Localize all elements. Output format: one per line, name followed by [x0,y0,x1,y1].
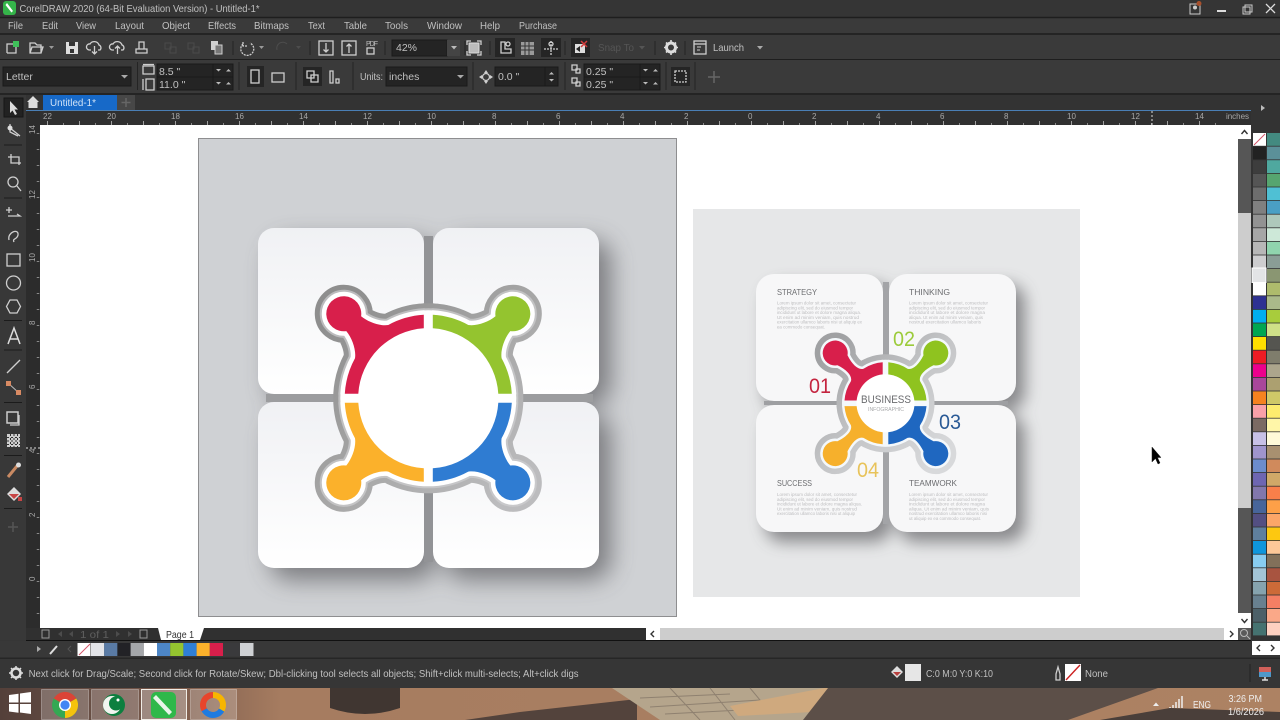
top ruler: 18 [171,112,180,121]
property bar: Units: [360,71,383,83]
text block: strategy [777,287,863,330]
top ruler: 6 [940,112,945,121]
menu bar: Layout [115,20,144,32]
panel: reference infographic [693,209,1080,597]
top ruler: 14 [299,112,308,121]
gaps between cards [764,282,1008,524]
text block: thinking: incididunt ut labore et dolore magna [909,310,986,315]
menu bar: Table [344,20,367,32]
menu bar: Edit [42,20,58,32]
property bar: 0.25 " [586,79,613,91]
left ruler: 12 [28,190,37,199]
property bar: 8.5 " [159,66,181,78]
property bar: 0.25 " [586,66,613,78]
property bar: Letter [6,71,33,83]
text block: teamwork [909,478,990,521]
text block: teamwork: TEAMWORK [909,478,957,488]
property bar: 0.0 " [498,71,520,83]
text block: success: SUCCESS [777,478,812,488]
taskbar: messenger button [92,690,138,720]
text block: success [777,478,862,516]
text block: thinking: THINKING [909,287,950,297]
standard toolbar: PDF [366,41,378,48]
page navigator and horizontal scrollbar [26,628,1251,642]
standard toolbar: Launch [713,42,744,54]
text block: success: incididunt ut labore et dolore magna aliqua. [777,502,862,507]
text block: thinking: Lorem ipsum dolor sit amet, consectetur [909,300,989,306]
top ruler: 4 [876,112,881,121]
standard toolbar [0,35,1280,59]
menu bar: File [8,20,23,32]
top ruler [26,111,1251,125]
panel: enlarged artwork [198,138,676,616]
text block: teamwork: Lorem ipsum dolor sit amet, consectetur [909,492,989,497]
text block: thinking [909,287,989,325]
left ruler [26,111,40,640]
title bar [0,0,1280,17]
menu bar: Object [162,20,190,32]
menu bar [0,18,1280,33]
center label [861,394,911,413]
four rounded cards [756,274,1016,532]
system tray and clock [1153,693,1264,718]
text block: strategy: Ut enim ad minim veniam, quis nostrud [777,315,860,320]
color palette [1251,95,1280,655]
taskbar: windows start icon [9,692,31,714]
left ruler: 0 [28,576,37,581]
text block: thinking: adipiscing elit, sed do eiusmod tempor [909,305,986,310]
left toolbox [0,95,26,640]
status bar [0,658,1280,688]
four-part hub ring [823,341,948,466]
number 01: 01 [809,375,831,398]
top ruler: 8 [492,112,497,121]
menu bar: Help [480,20,500,32]
document palette [0,641,1251,658]
menu bar: Tools [385,20,408,32]
vertical scrollbar [1238,125,1251,628]
property bar: 11.0 " [159,79,186,91]
taskbar: browser button [190,690,236,720]
white drawing canvas [40,125,1238,628]
text block: teamwork: adipiscing elit, sed do eiusmod tempor [909,497,986,502]
top ruler: 6 [556,112,561,121]
text block: success: Lorem ipsum dolor sit amet, consectetur [777,492,858,497]
text block: success: Ut enim ad minim veniam, quis nostrud [777,506,858,511]
text block: strategy: exercitation ullamco laboris nisi ut aliquip ex [777,320,863,325]
taskbar: coreldraw button [142,690,186,720]
center label: INFOGRAPHIC [868,407,904,413]
property bar [0,60,1280,93]
left ruler: 14 [28,125,37,134]
left ruler: 10 [28,253,37,262]
text block: success: exercitation ullamco laboris nisi ut aliquip [777,511,856,516]
top ruler: 4 [620,112,625,121]
top ruler: 12 [363,112,372,121]
menu bar: View [76,20,96,32]
gaps between cards [266,236,593,562]
top ruler: inches [1226,112,1249,121]
top ruler: 10 [427,112,436,121]
menu bar: Text [308,20,325,32]
card shadows [765,284,1025,542]
top ruler: 2 [812,112,817,121]
menu bar: Effects [208,20,236,32]
mouse cursor [1152,447,1161,464]
center label: BUSINESS [861,394,911,406]
text block: strategy: incididunt ut labore et dolore magna aliqua. [777,310,861,315]
text block: teamwork: aliqua. Ut enim ad minim veniam, quis [909,506,990,511]
left ruler: 6 [28,384,37,389]
four-part hub ring [326,296,530,500]
top ruler: 0 [748,112,753,121]
property bar: inches [389,71,419,83]
menu bar: Bitmaps [254,20,289,32]
text block: strategy: STRATEGY [777,287,817,297]
page navigator and horizontal scrollbar: Page 1 [166,629,194,641]
status bar: None [1085,668,1108,680]
system tray and clock: ENG [1193,699,1211,711]
system tray and clock: 1/6/2026 [1228,706,1264,718]
top ruler: 16 [235,112,244,121]
top ruler: 10 [1067,112,1076,121]
document tab row [0,95,1280,112]
number 04: 04 [857,459,879,482]
text block: teamwork: incididunt ut labore et dolore magna [909,502,986,507]
system tray and clock: 3:26 PM [1228,693,1262,705]
top ruler: 2 [684,112,689,121]
page navigator and horizontal scrollbar: 1 of 1 [80,629,109,641]
taskbar: chrome button [42,690,88,720]
text block: strategy: Lorem ipsum dolor sit amet, consectetur [777,300,857,306]
text block: thinking: aliqua. Ut enim ad minim veniam, quis [909,315,984,320]
text block: teamwork: ut aliquip ex ea commodo consequat. [909,516,981,521]
document tab row: Untitled-1* [50,97,96,109]
desktop wallpaper strip [0,688,1280,720]
card shadows [270,240,611,580]
standard toolbar: Snap To [598,42,634,54]
top ruler: 12 [1131,112,1140,121]
four rounded cards [258,228,599,568]
top ruler: 22 [43,112,52,121]
text block: success: adipiscing elit, sed do eiusmod tempor [777,497,854,502]
left ruler: 2 [28,512,37,517]
title bar: CorelDRAW 2020 (64-Bit Evaluation Version) - Untitled-1* [20,3,260,15]
text block: strategy: adipiscing elit, sed do eiusmod tempor [777,305,854,310]
status bar: Next click for Drag/Scale; Second click for Rotate/Skew; Dbl-clicking tool selects all objects; Shift+click multi-selects; Alt+click digs [29,668,579,680]
menu bar: Purchase [519,20,557,32]
top ruler: 20 [107,112,116,121]
menu bar: Window [427,20,462,32]
status bar: C:0 M:0 Y:0 K:10 [926,668,993,680]
top ruler: 14 [1195,112,1204,121]
text block: teamwork: nostrud exercitation ullamco laboris nisi [909,511,987,516]
left ruler: 4 [28,448,37,453]
text block: strategy: ea commodo consequat. [777,324,825,330]
left ruler: 8 [28,320,37,325]
number 02: 02 [893,328,915,351]
number 03: 03 [939,411,961,434]
text block: thinking: nostrud exercitation ullamco laboris [909,320,982,325]
top ruler: 8 [1004,112,1009,121]
standard toolbar: 42% [396,42,417,54]
